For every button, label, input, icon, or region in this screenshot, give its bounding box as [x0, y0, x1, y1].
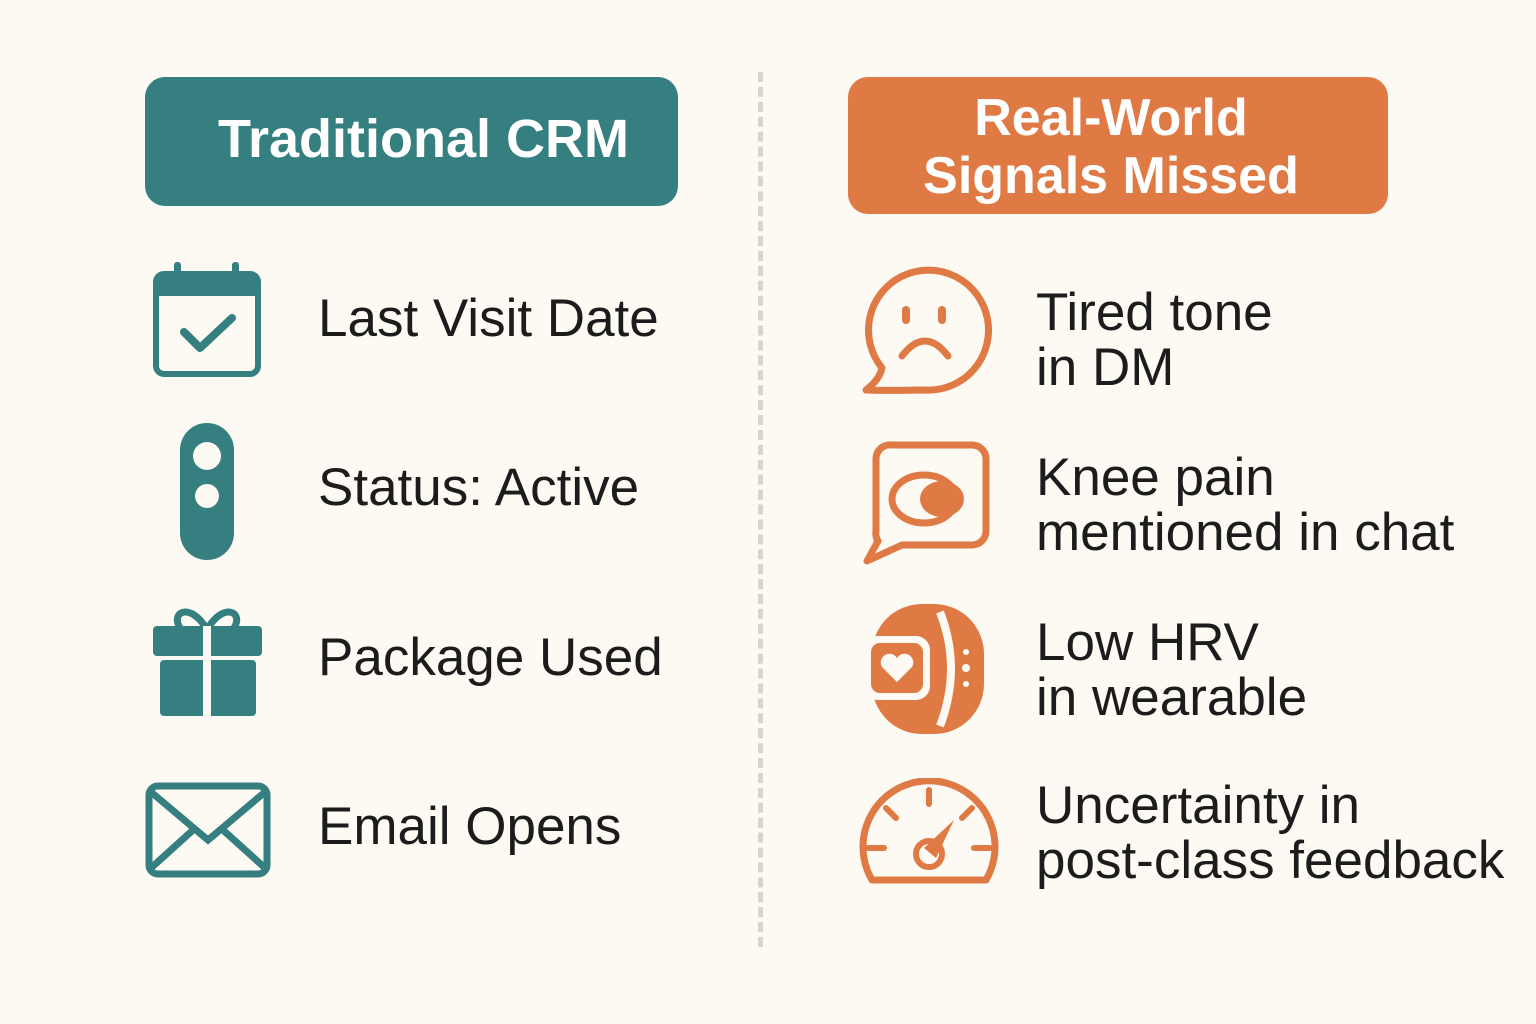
icon: chat with knee	[864, 441, 990, 564]
text: Low HRV in wearable	[1036, 613, 1307, 727]
text: Tired tone in DM: Tired tone	[1036, 283, 1273, 342]
icon: status toggle	[180, 423, 234, 560]
text: Uncertainty in post-class feedback: post-class feedback	[1036, 831, 1504, 890]
heading: Traditional CRM: Traditional CRM	[218, 109, 629, 169]
text: Last Visit Date: Last Visit Date	[318, 289, 659, 348]
divider	[758, 72, 763, 947]
text: Package Used: Package Used	[318, 628, 663, 687]
text: Email Opens: Email Opens	[318, 797, 621, 856]
text: Tired tone in DM	[1036, 283, 1273, 397]
text: Knee pain mentioned in chat: mentioned in chat	[1036, 503, 1454, 562]
text: Uncertainty in post-class feedback: Uncertainty in	[1036, 776, 1360, 835]
icon: calendar	[153, 262, 261, 377]
icon: wearable	[871, 604, 984, 734]
text: Low HRV in wearable: Low HRV	[1036, 613, 1259, 672]
text: Status: Active: Status: Active	[318, 458, 639, 517]
text: Low HRV in wearable: in wearable	[1036, 668, 1307, 727]
heading: Traditional CRM	[145, 77, 678, 206]
heading: Real-World Signals Missed	[848, 77, 1388, 214]
text: Uncertainty in post-class feedback	[1036, 776, 1504, 890]
icon: gauge	[860, 778, 998, 884]
icon: envelope	[146, 782, 270, 878]
icon: gift	[153, 608, 262, 716]
text: Tired tone in DM: in DM	[1036, 338, 1174, 397]
icon: sad chat	[862, 266, 992, 394]
heading: Real-World Signals Missed: Real-World	[974, 89, 1248, 147]
heading: Real-World Signals Missed: Signals Missed	[923, 147, 1299, 205]
text: Knee pain mentioned in chat	[1036, 448, 1454, 562]
text: Knee pain mentioned in chat: Knee pain	[1036, 448, 1275, 507]
